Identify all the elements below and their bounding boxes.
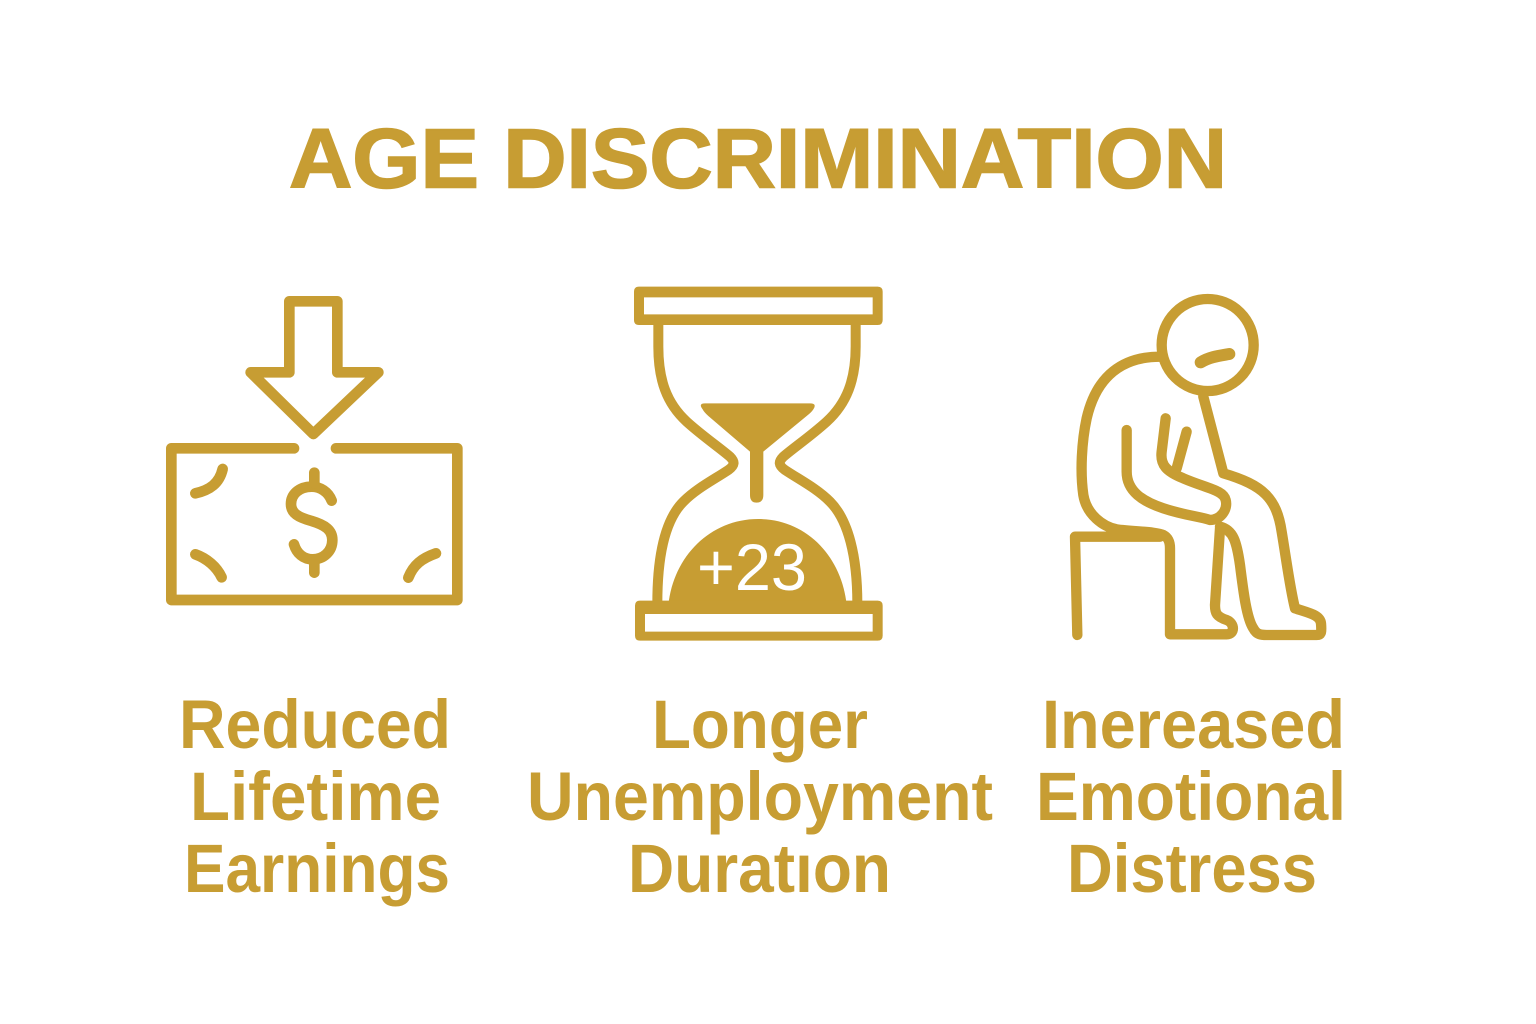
- label: reduced lifetime earnings: Reduced: [179, 686, 451, 763]
- icon: down arrow over dollar bill: [171, 301, 457, 600]
- person back and chair: [1082, 357, 1233, 634]
- hourglass sand pile: [668, 519, 847, 605]
- label: longer unemployment duration: Longer: [652, 686, 868, 763]
- label: longer unemployment duration: [527, 686, 993, 907]
- label: increased emotional distress: Distress: [1067, 830, 1317, 907]
- panel: longer unemployment duration: [527, 287, 993, 907]
- person thumb: [1177, 432, 1187, 468]
- panel: reduced lifetime earnings: [171, 301, 457, 907]
- label: increased emotional distress: [1036, 686, 1346, 907]
- person front leg: [1203, 397, 1321, 635]
- person head: [1162, 299, 1254, 391]
- hourglass number: +23: [697, 530, 807, 604]
- title: AGE DISCRIMINATION: [289, 112, 1227, 206]
- label: longer unemployment duration: Duratıon: [628, 830, 891, 907]
- person arm: [1127, 418, 1226, 520]
- label: reduced lifetime earnings: Lifetime: [190, 758, 441, 835]
- chair seat and leg: [1075, 537, 1160, 635]
- label: increased emotional distress: Inereased: [1042, 686, 1345, 763]
- panel: increased emotional distress: [1036, 299, 1346, 907]
- label: reduced lifetime earnings: Earnings: [184, 830, 450, 907]
- icon: dollar bill: [171, 448, 457, 600]
- icon: hourglass: [634, 287, 883, 641]
- hourglass top bar: [634, 287, 883, 325]
- label: increased emotional distress: Emotional: [1036, 758, 1346, 835]
- label: longer unemployment duration: Unemployment: [527, 758, 993, 835]
- icon: slumped seated person: [1075, 299, 1321, 635]
- hourglass bottom bar: [635, 601, 883, 641]
- label: reduced lifetime earnings: [179, 686, 451, 907]
- hourglass falling sand: [701, 403, 815, 503]
- icon: down arrow: [251, 301, 378, 434]
- hourglass glass outline: [657, 322, 857, 603]
- person brow: [1201, 354, 1229, 362]
